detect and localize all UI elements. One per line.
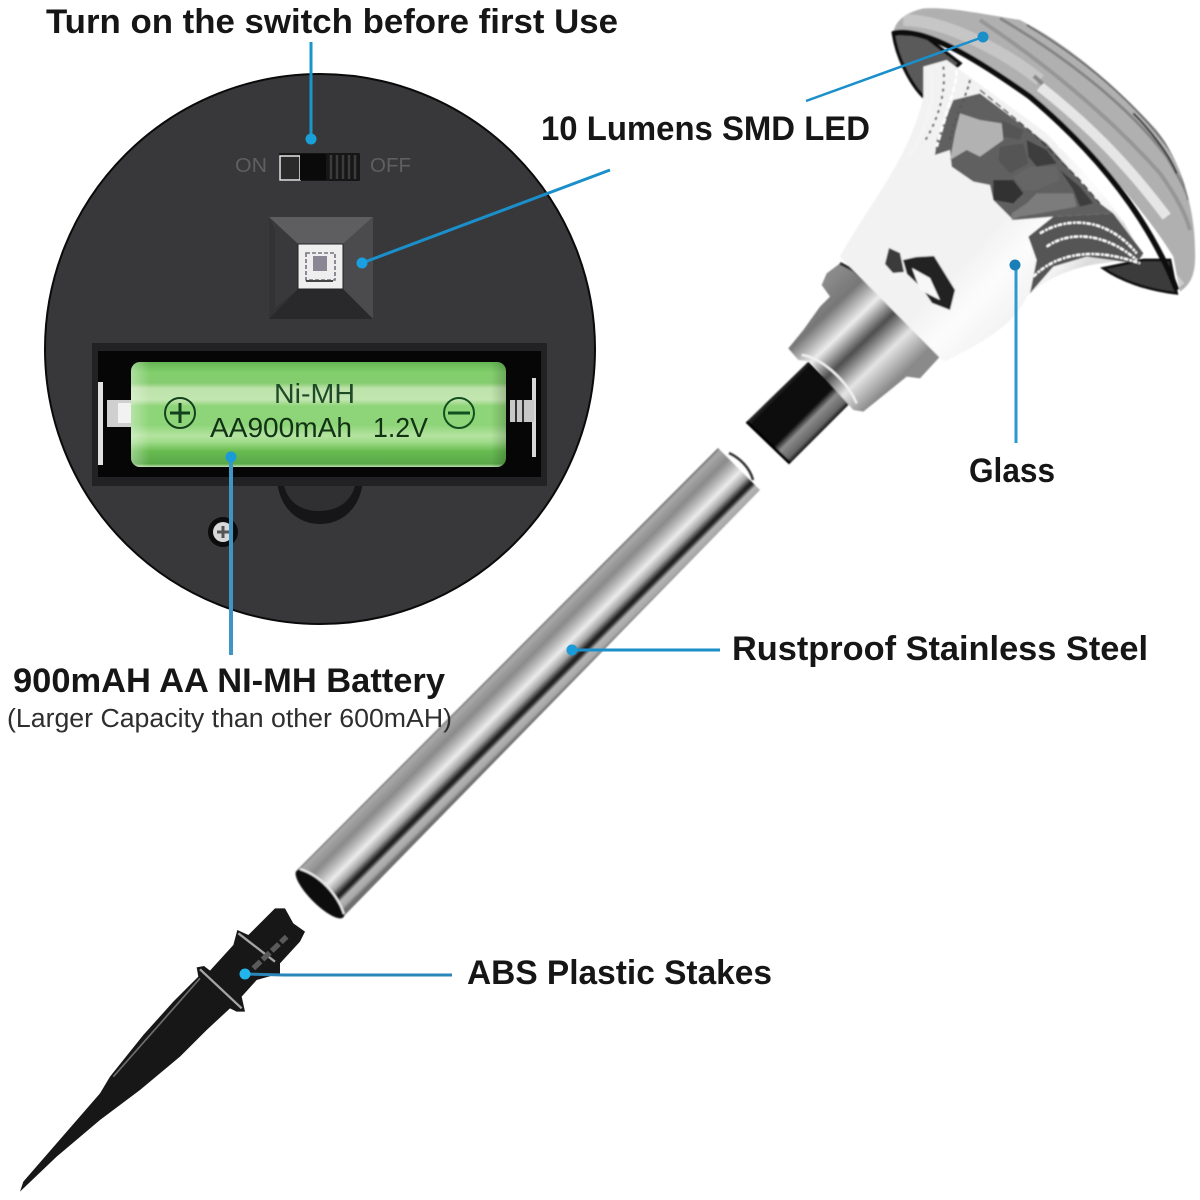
contacts: [98, 378, 536, 465]
stainless steel tube: [290, 448, 760, 924]
battery text: Ni-MH: [274, 378, 355, 409]
battery: [131, 362, 506, 467]
battery text: 1.2V: [373, 412, 428, 443]
label: steel: Rustproof Stainless Steel: [732, 630, 1148, 668]
battery compartment: [92, 343, 547, 524]
tube top end: [729, 453, 753, 480]
label: stakes: ABS Plastic Stakes: [467, 954, 772, 992]
cap underside left: [893, 33, 960, 97]
heading: switch note: Turn on the switch before first Use: [46, 3, 618, 41]
on/off switch: [235, 153, 411, 181]
battery text: [210, 378, 428, 443]
screw: [208, 517, 238, 547]
base disc: [45, 74, 595, 624]
plus symbol: [165, 398, 195, 428]
callout: LED chip: [356, 170, 610, 268]
on/off switch: OFF: [370, 155, 411, 177]
gray facet zone: [935, 93, 1113, 220]
black connector tube: [747, 362, 850, 463]
tube opening: [290, 864, 350, 924]
lower reflections: [1028, 213, 1143, 293]
glass shade: [840, 60, 1143, 362]
on/off switch: ON: [235, 155, 267, 177]
dark glass patch near collar: [885, 248, 955, 310]
callout: steel: [566, 644, 720, 656]
label: battery: 900mAH AA NI-MH Battery: [13, 662, 445, 700]
upper reflections: [910, 67, 1123, 220]
LED mount: [269, 217, 373, 319]
callout: head LED: [806, 32, 988, 101]
battery text: AA900mAh: [210, 412, 352, 443]
connector and collar: [747, 263, 940, 463]
callout: battery: [226, 452, 236, 655]
minus symbol: [444, 398, 474, 428]
battery tab: [277, 480, 363, 524]
callout: switch: [306, 42, 316, 144]
label: LED: 10 Lumens SMD LED: [541, 110, 870, 148]
callout: stake: [240, 968, 452, 980]
metal collar: [788, 263, 940, 412]
shade and cap: [840, 8, 1195, 362]
light facet: [950, 113, 1003, 160]
callout: glass: [1010, 260, 1020, 443]
stainless cap: [893, 8, 1195, 292]
note: battery capacity: (Larger Capacity than other 600mAH): [7, 705, 452, 733]
plastic stake: [20, 908, 305, 1192]
label: glass: Glass: [969, 452, 1055, 490]
dark facets: [993, 120, 1093, 220]
panel: lamp base underside: [45, 74, 595, 624]
cap underside right: [1103, 260, 1177, 293]
LED chip: [298, 244, 343, 289]
lamp head: [747, 8, 1195, 463]
